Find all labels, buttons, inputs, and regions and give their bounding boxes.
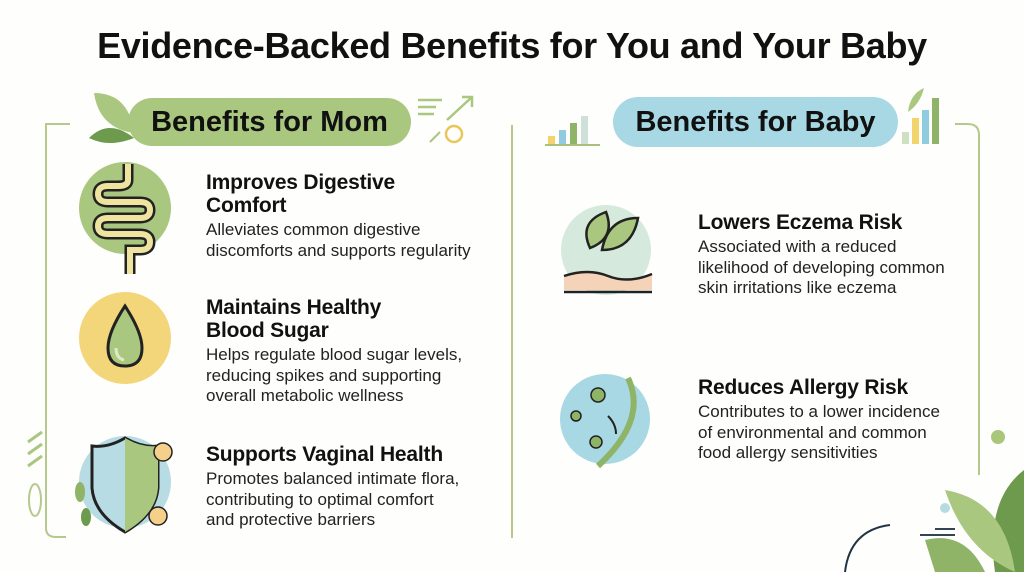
text block [206, 296, 462, 405]
text block: and protective barriers [206, 510, 375, 529]
text block: discomforts and supports regularity [206, 240, 471, 260]
text block: overall metabolic wellness [206, 386, 403, 405]
text block: of environmental and common [698, 422, 927, 442]
item: vaginal health [75, 436, 459, 534]
text block: likelihood of developing common [698, 258, 945, 276]
icon: leaf on skin [561, 205, 652, 295]
text block: Helps regulate blood sugar levels, [206, 345, 462, 364]
icon: bar chart left [548, 116, 588, 144]
text block [698, 376, 940, 462]
icon: intestine [79, 162, 171, 274]
text block: Maintains Healthy [206, 296, 381, 319]
text block: contributing to optimal comfort [206, 490, 434, 508]
item: blood sugar [79, 292, 462, 405]
icon: shield with flowers [75, 436, 173, 534]
text block: Promotes balanced intimate flora, [206, 469, 459, 488]
text block [698, 211, 945, 297]
icon: leaves near mom pill [89, 93, 134, 143]
icon: corner leaves [925, 470, 1024, 572]
item: allergy [560, 374, 940, 468]
title: Evidence-Backed Benefits for You and Your Baby [97, 25, 927, 66]
text block: Blood Sugar [206, 319, 329, 342]
text block: Alleviates common digestive [206, 220, 420, 239]
text block: Comfort [206, 194, 286, 217]
heading pill: Benefits for Mom: Benefits for Mom [151, 106, 388, 138]
text block: reducing spikes and supporting [206, 366, 441, 384]
item: digestive comfort [79, 162, 471, 274]
item: eczema [561, 205, 945, 297]
text block [206, 443, 459, 529]
icon: bar chart right with leaf [902, 88, 939, 144]
icon: drop [79, 292, 171, 384]
icon: allergens [560, 374, 650, 468]
text block: skin irritations like eczema [698, 278, 896, 297]
text block: Associated with a reduced [698, 237, 896, 256]
decorative left leaves [27, 430, 43, 517]
heading pill: Benefits for Mom [128, 98, 411, 146]
text block: Lowers Eczema Risk [698, 211, 902, 234]
text block: Improves Digestive [206, 171, 395, 194]
text block [206, 171, 471, 260]
text block: food allergy sensitivities [698, 443, 878, 462]
text block: Supports Vaginal Health [206, 443, 443, 466]
heading pill: Benefits for Baby [613, 97, 898, 147]
text block: Contributes to a lower incidence [698, 402, 940, 421]
icon: arrow decoration [418, 96, 474, 144]
heading pill: Benefits for Baby: Benefits for Baby [635, 106, 876, 138]
text block: Reduces Allergy Risk [698, 376, 908, 399]
